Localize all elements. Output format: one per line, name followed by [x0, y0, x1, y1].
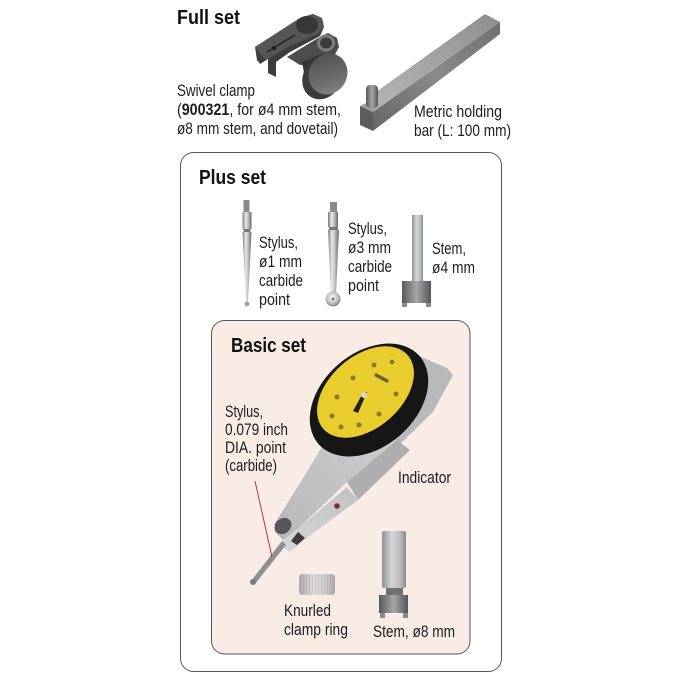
contact point [251, 541, 286, 584]
angled side piece [347, 440, 410, 500]
text: stylus point: Stylus, [225, 403, 263, 421]
text: stem 4 mm: ø4 mm [432, 259, 475, 277]
text: stylus 3 mm: point [348, 277, 379, 295]
text: stylus 3 mm: Stylus, [348, 220, 387, 238]
text: stem 4 mm [432, 240, 475, 277]
text: stylus point: (carbide) [225, 457, 277, 475]
near end top [360, 102, 380, 112]
side face [373, 22, 500, 131]
text: stylus point [225, 403, 288, 475]
swivel clamp caption: ø8 mm stem, and dovetail) [177, 120, 338, 138]
bar caption [414, 103, 511, 140]
text: stylus point: DIA. point [225, 439, 286, 457]
needle [353, 392, 367, 413]
heading: Basic set: Basic set [231, 335, 306, 357]
text: knurled clamp ring [284, 602, 348, 639]
red dot [334, 503, 340, 509]
near end face [360, 106, 373, 131]
text: knurled clamp ring: Knurled [284, 602, 331, 620]
dial face [300, 328, 431, 456]
brand [374, 373, 389, 383]
swivel clamp caption: Swivel clamp [177, 82, 255, 100]
knob edge [295, 49, 349, 107]
dial marks [330, 360, 398, 430]
text: stylus point: 0.079 inch [225, 421, 288, 439]
pivot screw [271, 514, 295, 538]
text: stem 4 mm: Stem, [432, 240, 466, 258]
upper jaw [255, 14, 324, 77]
pin [366, 85, 378, 108]
icon: stem 8 mm [379, 531, 408, 618]
icon: dial indicator [250, 321, 453, 585]
text: stylus 1 mm: ø1 mm [259, 253, 302, 271]
knob face [301, 46, 355, 102]
leader line [255, 481, 272, 557]
top face [373, 14, 500, 112]
panel: Basic set [212, 320, 470, 654]
text: stylus 1 mm: carbide [259, 272, 303, 290]
panel: Plus set [180, 152, 502, 672]
icon: stylus 1 mm [242, 200, 252, 306]
knob neck [302, 54, 335, 88]
bar caption: bar (L: 100 mm) [414, 122, 511, 140]
text: stylus 1 mm: point [259, 291, 290, 309]
text: stylus 1 mm [259, 234, 303, 309]
text: stylus 3 mm [348, 220, 392, 295]
swivel clamp caption: (900321, for ø4 mm stem, [177, 101, 341, 119]
body plate [275, 440, 397, 540]
icon: stem 4 mm [402, 215, 431, 307]
heading: Plus set: Plus set [199, 167, 266, 189]
icon: metric holding bar [360, 14, 500, 131]
icon: swivel clamp [255, 14, 355, 107]
bar caption: Metric holding [414, 103, 502, 121]
icon: knurled clamp ring [299, 574, 335, 595]
swivel clamp caption [177, 82, 341, 138]
text: stem 8 mm: Stem, ø8 mm [373, 623, 455, 641]
text: knurled clamp ring: clamp ring [284, 621, 348, 639]
text: stylus 1 mm: Stylus, [259, 234, 298, 252]
second block [287, 33, 339, 65]
text: indicator: Indicator [398, 469, 451, 487]
lever arm [283, 487, 358, 552]
rear bracket [385, 355, 453, 447]
text: stylus 3 mm: ø3 mm [348, 239, 391, 257]
heading: Full set: Full set [177, 7, 240, 29]
text: stylus 3 mm: carbide [348, 258, 392, 276]
notch [291, 532, 305, 545]
icon: stylus 3 mm [326, 202, 340, 306]
dial bezel [288, 321, 450, 479]
